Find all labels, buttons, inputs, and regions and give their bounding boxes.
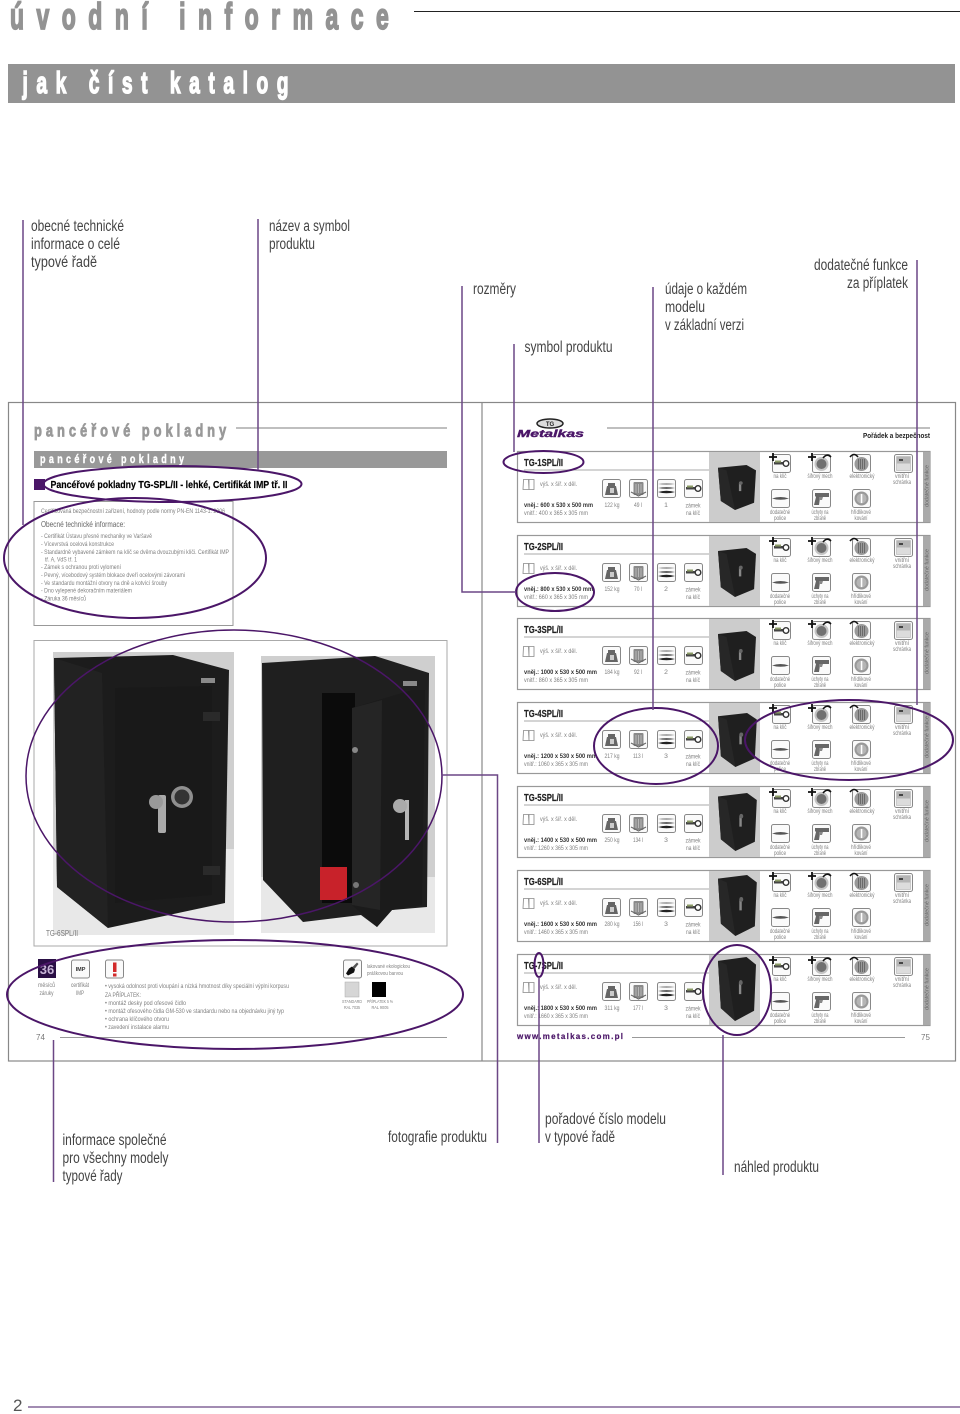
specification icons: zámek <box>686 586 701 594</box>
specification icons: na klíč <box>686 677 700 684</box>
specification icons: 49 l <box>634 502 642 509</box>
optional extras: šifrový mech <box>808 809 832 815</box>
product row TG-2SPL/II <box>518 536 930 606</box>
specification icons: zámek <box>686 754 701 760</box>
optional extras: hřídlikové <box>851 1013 872 1019</box>
safe thumbnail <box>718 548 756 597</box>
optional extras: šifrový mech <box>808 558 832 564</box>
dimensions <box>523 480 593 517</box>
icon: IMP certificate: IMP <box>76 967 86 973</box>
dimensions: vněj.: 800 x 530 x 500 mm <box>524 586 593 593</box>
specification icons: zámek <box>686 670 701 676</box>
colour swatches: PŘÍPLATEK 5 % <box>367 997 394 1005</box>
callout: general technical information: typové řadě <box>31 254 97 271</box>
callout: model data: modelu <box>665 299 705 316</box>
panel: general technical information: - Dno vylepené dekoračním materiálem <box>41 588 132 594</box>
product row TG-4SPL/II <box>518 702 930 774</box>
optional extras: kování <box>854 1019 868 1025</box>
specification icons: 184 kg <box>604 669 620 676</box>
icon: 36 months warranty: 36 <box>40 962 54 977</box>
specification icons: 250 kg <box>604 837 620 844</box>
specification icons <box>602 730 702 768</box>
optional extras: hřídlikové <box>851 845 872 851</box>
dimensions <box>523 898 597 936</box>
optional extras: zbraně <box>814 1019 826 1025</box>
dimensions: vnitř.: 860 x 365 x 305 mm <box>524 678 588 684</box>
colour swatches: STANDARD <box>342 999 362 1005</box>
optional extras: vnitřní <box>895 641 909 647</box>
model name: TG-7SPL/II <box>524 961 563 972</box>
specification icons: 2 <box>664 669 668 676</box>
optional extras <box>769 704 912 773</box>
optional extras: hřídlikové <box>851 677 872 683</box>
specification icons: 1 <box>664 502 668 509</box>
logo: Metalkas <box>517 419 584 440</box>
optional extras: zbraně <box>814 683 826 689</box>
specification icons: 156 l <box>633 921 643 928</box>
dimensions: výš. x šíř. x děl. <box>540 985 577 991</box>
optional extras: police <box>774 1019 786 1025</box>
paint note: práškovou barvou <box>367 971 403 977</box>
dimensions: výš. x šíř. x děl. <box>540 733 577 739</box>
specification icons: zámek <box>686 922 701 928</box>
optional extras: vnitřní <box>895 474 909 480</box>
website: www.metalkas.com.pl <box>516 1032 623 1041</box>
product row TG-1SPL/II: dodatečné funkce <box>924 465 930 507</box>
callout: model number: v typové řadě <box>545 1129 615 1146</box>
optional extras: úchyty na <box>812 845 829 851</box>
optional extras <box>769 620 912 689</box>
callout: optional features: za příplatek <box>847 275 908 292</box>
optional extras: dodatečné <box>770 845 790 851</box>
product row TG-7SPL/II <box>518 954 930 1026</box>
callout: product symbol: symbol produktu <box>524 339 612 356</box>
dimensions: výš. x šíř. x děl. <box>540 566 577 572</box>
warranty label: záruky <box>40 990 54 997</box>
callout: shared information: pro všechny modely <box>62 1150 169 1167</box>
dimensions <box>523 730 597 768</box>
specification icons: 70 l <box>634 586 642 593</box>
optional extras: na klíč <box>774 725 786 731</box>
specification icons: 217 kg <box>604 753 620 760</box>
optional extras <box>769 537 912 606</box>
optional extras: schránka <box>893 647 911 653</box>
dimensions: výš. x šíř. x děl. <box>540 482 577 488</box>
panel: general technical information: - Pevný, vícebodový systém blokace dveří ocelovými závorami <box>41 573 185 579</box>
optional extras: elektronický <box>850 809 874 815</box>
safe thumbnail <box>718 631 756 681</box>
optional extras: elektronický <box>850 977 874 983</box>
heading bar: jak číst katalog <box>8 64 955 103</box>
icon: exclamation mark <box>106 960 124 978</box>
optional extras: dodatečné <box>770 1013 790 1019</box>
specification icons: zámek <box>686 838 701 844</box>
specification icons: 152 kg <box>604 586 620 593</box>
optional extras: hřídlikové <box>851 761 872 767</box>
optional extras: šifrový mech <box>808 725 832 731</box>
optional extras: zbraně <box>814 935 826 941</box>
optional extras: dodatečné <box>770 677 790 683</box>
callout: model number: pořadové číslo modelu <box>545 1111 666 1128</box>
specification icons: 113 l <box>633 753 643 760</box>
icon: paint brush <box>344 960 362 978</box>
logo: Metalkas: TG <box>546 422 554 428</box>
paint note: lakované ekologickou <box>367 964 410 970</box>
optional extras: zbraně <box>814 767 826 773</box>
model name: TG-3SPL/II <box>524 625 563 636</box>
specification icons <box>602 646 702 684</box>
dimensions: vněj.: 1000 x 530 x 500 mm <box>524 669 597 676</box>
callout: product photo: fotografie produktu <box>388 1129 487 1146</box>
model name: TG-4SPL/II <box>524 709 563 720</box>
product row TG-5SPL/II: dodatečné funkce <box>924 800 930 842</box>
safe thumbnail <box>718 465 756 510</box>
specification icons: 3 <box>664 1005 668 1012</box>
optional extras: dodatečné <box>770 761 790 767</box>
photo caption: TG-6SPL/II <box>46 929 78 938</box>
optional extras: úchyty na <box>812 677 829 683</box>
icon: 36 months warranty <box>38 959 56 978</box>
optional extras: vnitřní <box>895 725 909 731</box>
optional extras: elektronický <box>850 725 874 731</box>
optional extras: vnitřní <box>895 977 909 983</box>
specification icons: zámek <box>686 1006 701 1012</box>
dimensions: vnitř.: 400 x 365 x 305 mm <box>524 511 588 517</box>
specification icons: zámek <box>686 502 701 510</box>
specification icons: 177 l <box>633 1005 643 1012</box>
optional extras: úchyty na <box>812 510 829 516</box>
optional extras: hřídlikové <box>851 510 872 516</box>
section bar: pancéřové pokladny <box>34 451 447 468</box>
optional extras: police <box>774 516 786 522</box>
optional extras: kování <box>854 683 868 689</box>
callout: product preview: náhled produktu <box>734 1159 819 1176</box>
optional extras: hřídlikové <box>851 594 872 600</box>
model name: TG-6SPL/II <box>524 877 563 888</box>
dimensions: vnitř.: 660 x 365 x 305 mm <box>524 595 588 601</box>
specification icons: 92 l <box>634 669 642 676</box>
specification icons <box>602 480 702 517</box>
optional extras: police <box>774 935 786 941</box>
panel heading: pancéřové pokladny: pancéřové pokladny <box>34 422 226 441</box>
callout: general technical information: informace o celé <box>31 236 120 253</box>
specification icons: 3 <box>664 753 668 760</box>
optional extras: police <box>774 851 786 857</box>
panel: general technical information: tř. A, VdS tř. 1 <box>45 558 78 564</box>
callout: shared information: typové řady <box>62 1168 123 1185</box>
panel: general technical information: - Ve standardu montážní otvory na dně a kotvící šrouby <box>41 581 167 587</box>
colour swatches <box>342 982 394 1011</box>
optional extras: zbraně <box>814 600 826 606</box>
optional extras: šifrový mech <box>808 977 832 983</box>
specification icons <box>602 564 702 601</box>
panel: product photos <box>34 640 447 946</box>
dimensions: vněj.: 1800 x 530 x 500 mm <box>524 1005 597 1012</box>
callout: model data: údaje o každém <box>665 281 747 298</box>
specification icons: 3 <box>664 921 668 928</box>
specification icons <box>602 898 702 936</box>
optional extras: schránka <box>893 899 911 905</box>
safe thumbnail <box>718 957 756 1021</box>
panel: general technical information <box>34 502 233 626</box>
product row TG-5SPL/II <box>518 786 930 858</box>
model name: TG-2SPL/II <box>524 542 563 553</box>
dimensions <box>523 982 597 1020</box>
specification icons: na klíč <box>686 761 700 768</box>
dimensions: výš. x šíř. x děl. <box>540 817 577 823</box>
optional extras: na klíč <box>774 809 786 815</box>
specification icons: na klíč <box>686 510 700 517</box>
safe thumbnail <box>718 713 757 767</box>
callout: shared information: informace společné <box>62 1132 166 1149</box>
optional extras: na klíč <box>774 893 786 899</box>
optional extras: schránka <box>893 815 911 821</box>
dimensions: výš. x šíř. x děl. <box>540 649 577 655</box>
panel: catalogue spread frame <box>8 402 956 1061</box>
dimensions: vněj.: 1400 x 530 x 500 mm <box>524 837 597 844</box>
callout: product name and symbol: produktu <box>269 236 315 253</box>
feature list <box>105 984 289 1031</box>
safe thumbnail <box>718 875 757 936</box>
product row TG-4SPL/II: dodatečné funkce <box>924 716 930 758</box>
optional extras: dodatečné <box>770 929 790 935</box>
optional extras: na klíč <box>774 558 786 564</box>
product series heading: Pancéřové pokladny TG-SPL/II - lehké, Certifikát IMP tř. II <box>50 479 288 491</box>
callout: model data: v základní verzi <box>665 317 744 334</box>
page number 75: 75 <box>921 1033 930 1042</box>
specification icons <box>602 982 702 1020</box>
feature list: ZA PŘÍPLATEK: <box>105 991 141 999</box>
optional extras: úchyty na <box>812 594 829 600</box>
dimensions: vnitř.: 1260 x 365 x 305 mm <box>524 846 588 852</box>
optional extras: dodatečné <box>770 594 790 600</box>
panel: general technical information: - Standardně vybavené zámkem na klíč se dvěma dvouzubými klíči. Certifikát IMP <box>41 550 229 556</box>
callout highlight ellipses <box>4 451 953 1049</box>
optional extras: úchyty na <box>812 1013 829 1019</box>
specification icons: 3 <box>664 837 668 844</box>
optional extras: zbraně <box>814 516 826 522</box>
certificate label: IMP <box>76 990 84 997</box>
optional extras: zbraně <box>814 851 826 857</box>
optional extras: šifrový mech <box>808 641 832 647</box>
callout: dimensions: rozměry <box>473 281 516 298</box>
panel: general technical information: Obecné technické informace: <box>41 519 125 529</box>
optional extras: police <box>774 767 786 773</box>
tagline: Pořádek a bezpečnost <box>863 431 930 440</box>
optional extras <box>769 956 912 1025</box>
specification icons: 280 kg <box>604 921 620 928</box>
model name: TG-1SPL/II <box>524 458 563 469</box>
optional extras: schránka <box>893 564 911 570</box>
optional extras: na klíč <box>774 977 786 983</box>
callout: optional features: dodatečné funkce <box>814 257 908 274</box>
specification icons: na klíč <box>686 845 700 852</box>
optional extras: police <box>774 600 786 606</box>
feature list: • ochrana klíčového otvoru <box>105 1017 169 1023</box>
specification icons: na klíč <box>686 1013 700 1020</box>
optional extras: elektronický <box>850 558 874 564</box>
optional extras <box>769 788 912 857</box>
specification icons <box>602 814 702 852</box>
dimensions: vnitř.: 1060 x 365 x 305 mm <box>524 762 588 768</box>
optional extras: schránka <box>893 731 911 737</box>
panel: general technical information: - Zámek s ochranou proti vylomení <box>41 565 121 571</box>
callout: general technical information: obecné technické <box>31 218 124 235</box>
product row TG-7SPL/II: dodatečné funkce <box>924 968 930 1010</box>
optional extras: na klíč <box>774 474 786 480</box>
icon: IMP certificate <box>72 960 90 978</box>
dimensions: vněj.: 1200 x 530 x 500 mm <box>524 753 597 760</box>
dimensions <box>523 564 593 601</box>
product row TG-6SPL/II: dodatečné funkce <box>924 884 930 926</box>
photo: open safe <box>261 656 435 933</box>
optional extras: hřídlikové <box>851 929 872 935</box>
feature list: • montáž desky pod ofesové čidlo <box>105 1001 187 1007</box>
product row TG-3SPL/II <box>518 618 930 690</box>
product row TG-2SPL/II: dodatečné funkce <box>924 549 930 591</box>
panel: general technical information: Certifikovaná bezpečnostní zařízení, hodnoty podle normy PN-EN 1143-1: 2006 <box>41 509 226 515</box>
optional extras: police <box>774 683 786 689</box>
specification icons: na klíč <box>686 929 700 936</box>
heading bar: jak číst katalog: jak číst katalog <box>22 67 288 100</box>
safe thumbnail <box>718 793 757 851</box>
panel: general technical information: - Certifikát Ústavu přesné mechaniky ve Varšavě <box>41 533 153 540</box>
callout: product name and symbol: název a symbol <box>269 218 350 235</box>
dimensions <box>523 646 597 684</box>
product row TG-1SPL/II <box>518 452 930 522</box>
feature list: • vysoká odolnost proti vloupání a nízká hmotnost díky speciální výplni korpusu <box>105 984 289 990</box>
optional extras: vnitřní <box>895 893 909 899</box>
optional extras: kování <box>854 516 868 522</box>
certificate label: certifikát <box>71 982 89 989</box>
product row TG-6SPL/II <box>518 870 930 942</box>
specification icons: 2 <box>664 586 668 593</box>
dimensions: vnitř.: 1660 x 365 x 305 mm <box>524 1014 588 1020</box>
specification icons: 122 kg <box>604 502 620 509</box>
optional extras: elektronický <box>850 474 874 480</box>
dimensions: vněj.: 1600 x 530 x 500 mm <box>524 921 597 928</box>
optional extras: kování <box>854 935 868 941</box>
specification icons: 311 kg <box>604 1005 620 1012</box>
specification icons: 134 l <box>633 837 643 844</box>
callout leader lines <box>23 219 917 1182</box>
optional extras <box>769 453 912 522</box>
panel: general technical information: - Záruka 36 měsíců <box>41 596 86 602</box>
dimensions: vnitř.: 1460 x 365 x 305 mm <box>524 930 588 936</box>
optional extras: schránka <box>893 983 911 989</box>
model name: TG-5SPL/II <box>524 793 563 804</box>
optional extras: na klíč <box>774 641 786 647</box>
dimensions: výš. x šíř. x děl. <box>540 901 577 907</box>
logo: Metalkas: Metalkas <box>517 428 584 440</box>
photo: closed safe <box>53 652 234 935</box>
optional extras: elektronický <box>850 641 874 647</box>
section bar: pancéřové pokladny: pancéřové pokladny <box>40 453 184 466</box>
panel: general technical information: - Vícevrstvá ocelová konstrukce <box>41 542 115 548</box>
product row TG-3SPL/II: dodatečné funkce <box>924 632 930 674</box>
panel: shared model information <box>38 959 410 1031</box>
optional extras: šifrový mech <box>808 474 832 480</box>
warranty label: měsíců <box>38 981 55 989</box>
optional extras <box>769 872 912 941</box>
optional extras: kování <box>854 767 868 773</box>
optional extras: vnitřní <box>895 809 909 815</box>
optional extras: vnitřní <box>895 558 909 564</box>
optional extras: schránka <box>893 480 911 486</box>
dimensions: vněj.: 600 x 530 x 500 mm <box>524 502 593 509</box>
optional extras: úchyty na <box>812 929 829 935</box>
specification icons: na klíč <box>686 594 700 601</box>
dimensions <box>523 814 597 852</box>
optional extras: úchyty na <box>812 761 829 767</box>
optional extras: elektronický <box>850 893 874 899</box>
page number 74: 74 <box>36 1033 45 1042</box>
colour swatches: RAL 9005 <box>372 1005 389 1011</box>
colour swatches: RAL 7035 <box>344 1005 360 1011</box>
optional extras: šifrový mech <box>808 893 832 899</box>
optional extras: kování <box>854 851 868 857</box>
optional extras: dodatečné <box>770 510 790 516</box>
feature list: • montáž ofesového čidla GM-530 ve standardu nebo na objednávku jiný typ <box>105 1009 285 1015</box>
feature list: • zavedení instalace alarmu <box>105 1025 169 1031</box>
optional extras: kování <box>854 600 868 606</box>
